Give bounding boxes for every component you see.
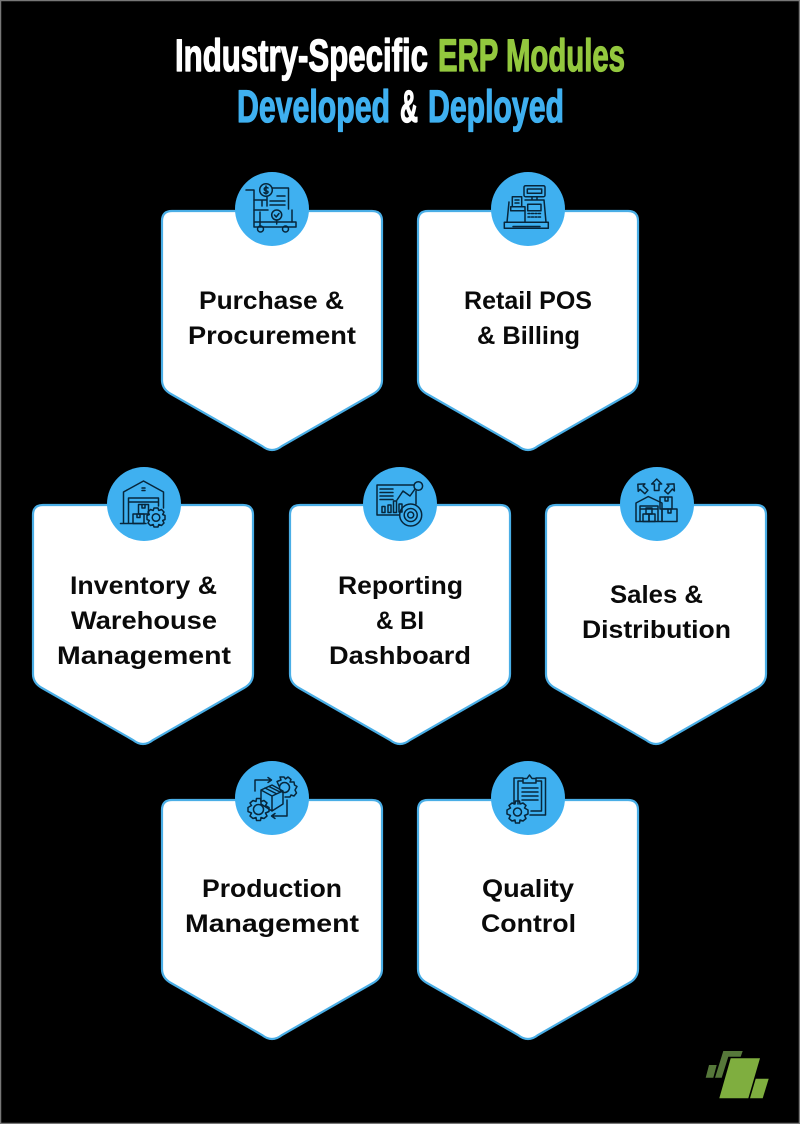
label: & Billing — [477, 322, 580, 350]
label: Quality — [482, 875, 574, 903]
label: & BI — [376, 607, 424, 635]
label: Retail POS — [464, 287, 592, 315]
panel: Inventory & Warehouse Management — [33, 467, 253, 744]
label: Purchase & — [199, 287, 344, 315]
label: Management — [57, 642, 232, 670]
label: Management — [185, 910, 360, 938]
label — [188, 287, 357, 350]
label: Procurement — [188, 322, 357, 350]
label: Reporting — [338, 572, 463, 600]
icon: box with gears — [235, 761, 309, 835]
icon: analytics dashboard — [363, 467, 437, 541]
label: Sales & — [610, 581, 703, 609]
label — [329, 572, 471, 670]
panel: Production Management — [162, 761, 382, 1039]
icon: shopping cart with invoice — [235, 172, 309, 246]
icon: cash register — [491, 172, 565, 246]
label — [185, 875, 360, 938]
panel: Purchase & Procurement — [162, 172, 382, 450]
label — [481, 875, 576, 938]
title: Deployed — [428, 81, 564, 132]
panel: Reporting & BI Dashboard — [290, 467, 510, 744]
title: Developed — [237, 81, 390, 132]
icon: clipboard with gear — [491, 761, 565, 835]
label — [464, 287, 592, 350]
label: Inventory & — [70, 572, 217, 600]
panel: Retail POS & Billing — [418, 172, 638, 450]
title: ERP Modules — [438, 30, 625, 81]
title: & — [400, 81, 418, 132]
label: Warehouse — [71, 607, 217, 635]
label: Production — [202, 875, 342, 903]
panel: Sales & Distribution — [546, 467, 766, 744]
label: Control — [481, 910, 576, 938]
icon: warehouse distribution — [620, 467, 694, 541]
icon: warehouse with gear — [107, 467, 181, 541]
label: Distribution — [582, 616, 731, 644]
title — [175, 30, 625, 132]
label — [582, 581, 731, 644]
panel: Quality Control — [418, 761, 638, 1039]
label — [57, 572, 232, 670]
label: Dashboard — [329, 642, 471, 670]
logo — [706, 1051, 769, 1098]
title: Industry-Specific — [175, 30, 428, 81]
